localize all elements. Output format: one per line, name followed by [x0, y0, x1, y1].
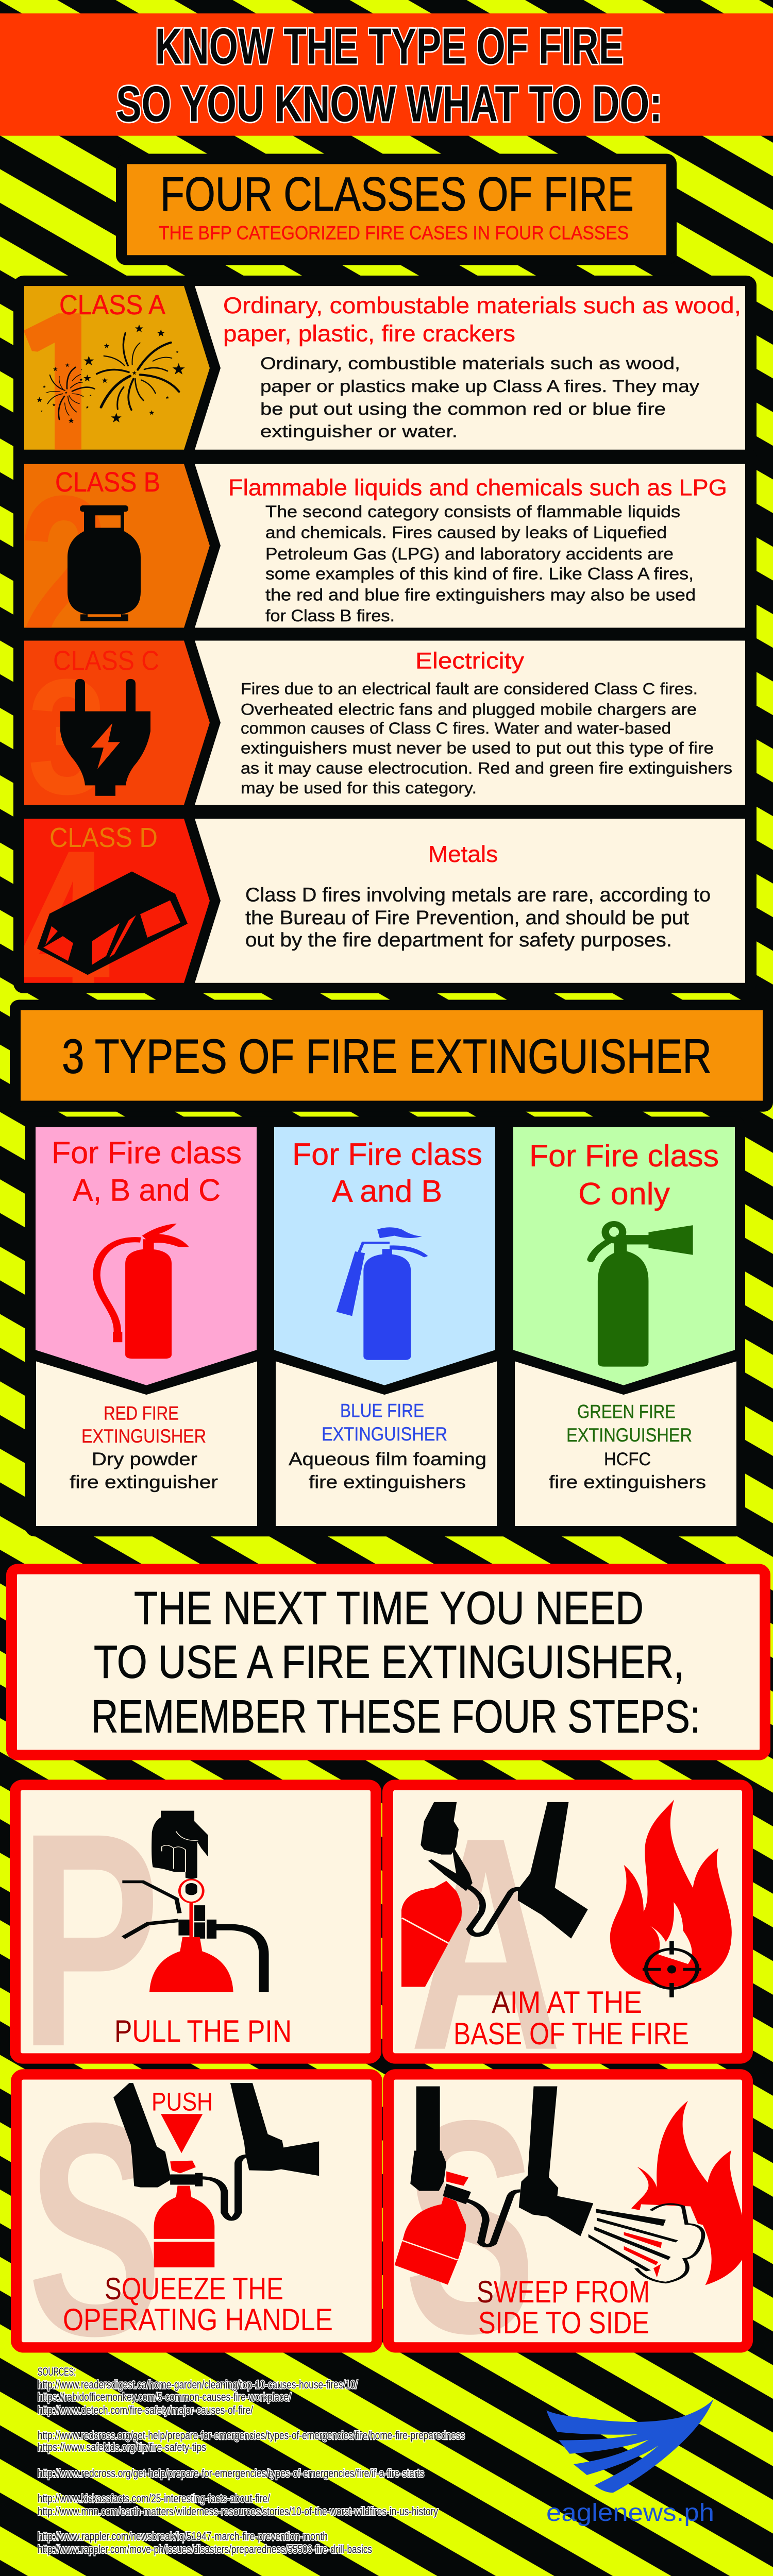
- step caption: [453, 1985, 689, 2051]
- sources list: SOURCES:: [38, 2365, 76, 2378]
- class label: CLASS D: [49, 822, 158, 853]
- heading panel: four classes of fire: [116, 154, 677, 265]
- type text: GREEN FIRE: [577, 1401, 676, 1422]
- step caption: [63, 2272, 333, 2337]
- sources list: http://www.detech.com/fire-safety/major-causes-of-fire/: [38, 2404, 254, 2416]
- class label: CLASS B: [55, 466, 160, 498]
- sources list: http://www.readersdigest.ca/home-garden/cleaning/top-10-causes-house-fires/10/: [38, 2378, 358, 2391]
- class A text: paper or plastics make up Class A fires. They may: [260, 377, 700, 396]
- class text: [529, 1139, 719, 1211]
- panel: sweep side to side: [389, 2058, 747, 2397]
- class text: A and B: [332, 1174, 442, 1208]
- class B text: The second category consists of flammable liquids: [265, 503, 680, 521]
- type text: fire extinguishers: [549, 1472, 706, 1492]
- subheading: THE BFP CATEGORIZED FIRE CASES IN FOUR CLASSES: [159, 222, 629, 243]
- class D heading: Metals: [428, 841, 498, 867]
- class C text: Fires due to an electrical fault are considered Class C fires.: [241, 680, 698, 698]
- icon: blue extinguisher: [337, 1227, 428, 1360]
- step caption: OPERATING HANDLE: [63, 2302, 333, 2337]
- class A text: [260, 354, 700, 441]
- heading panel: 3 types of fire extinguisher: [10, 1000, 773, 1112]
- step caption: AIM AT THE: [492, 1985, 642, 2020]
- icon: fireworks: [37, 325, 185, 423]
- ghost letter A: A: [409, 1774, 562, 2113]
- step caption: SQUEEZE THE: [105, 2272, 283, 2306]
- class text: [52, 1136, 242, 1207]
- class A text: Ordinary, combustible materials such as wood,: [260, 354, 680, 373]
- sources list: http://www.rappler.com/newsbreak/iq/51947-march-fire-prevention-month: [38, 2530, 328, 2543]
- row: class C: [24, 641, 745, 805]
- row: class B: [24, 464, 745, 628]
- sources list: https://www.safekids.org/tip/fire-safety-tips: [38, 2441, 206, 2454]
- class A heading: Ordinary, combustable materials such as wood,: [223, 293, 741, 318]
- class C text: extinguishers must never be used to put out this type of fire: [241, 739, 714, 757]
- icon: aim extinguisher at flame: [401, 1800, 732, 1997]
- type text: EXTINGUISHER: [81, 1425, 206, 1447]
- class text: [292, 1137, 482, 1208]
- card: red extinguisher: [36, 1127, 257, 1526]
- logo: eaglenews.ph: [546, 2399, 714, 2527]
- class B text: and chemicals. Fires caused by leaks of Liquefied: [265, 523, 667, 542]
- type text: HCFC: [604, 1450, 651, 1469]
- class A text: extinguisher or water.: [260, 422, 458, 441]
- ghost letter S: S: [404, 2058, 536, 2397]
- class C text: [241, 680, 732, 797]
- type text: RED FIRE: [104, 1402, 179, 1423]
- type text: BLUE FIRE: [340, 1400, 424, 1421]
- class A heading: [223, 293, 741, 346]
- icon: eagle wing: [546, 2399, 714, 2493]
- class B text: the red and blue fire extinguishers may also be used: [265, 586, 696, 604]
- step caption: [477, 2275, 650, 2340]
- sources list: http://www.mnn.com/earth-matters/wilderness-resources/stories/10-of-the-worst-wildfires-in-us-history: [38, 2505, 439, 2518]
- card: blue extinguisher: [274, 1127, 497, 1526]
- type text: EXTINGUISHER: [322, 1423, 447, 1445]
- type text: fire extinguishers: [309, 1472, 466, 1492]
- step caption: SIDE TO SIDE: [478, 2306, 649, 2340]
- ghost letter S: S: [27, 2060, 162, 2399]
- class label: CLASS C: [53, 645, 159, 676]
- icon: sweep extinguisher: [395, 2087, 743, 2285]
- card: green extinguisher: [513, 1127, 736, 1526]
- class C text: as it may cause electrocution. Red and green fire extinguishers: [241, 759, 732, 777]
- sources list: http://www.rappler.com/move-ph/issues/disasters/preparedness/55503-fire-drill-basics: [38, 2543, 372, 2556]
- type text: fire extinguisher: [70, 1472, 218, 1492]
- sources list: http://www.redcross.org/get-help/prepare-for-emergencies/types-of-emergencies/fire/home-fire-preparedness: [38, 2429, 465, 2442]
- class D text: the Bureau of Fire Prevention, and should be put: [245, 907, 689, 929]
- sources list: [38, 2365, 465, 2556]
- type text: Aqueous film foaming: [289, 1450, 486, 1469]
- panel: classes of fire: [13, 276, 757, 1058]
- class B text: some examples of this kind of fire. Like Class A fires,: [265, 565, 694, 584]
- class D text: [245, 884, 711, 951]
- class label: CLASS A: [59, 289, 165, 320]
- sources list: http://www.redcross.org/get-help/prepare-for-emergencies/types-of-emergencies/fire/if-a-fire-starts: [38, 2467, 424, 2480]
- numeral 1: [24, 313, 81, 450]
- type text: [289, 1400, 486, 1492]
- class C text: may be used for this category.: [241, 778, 477, 797]
- panel: squeeze the handle: [16, 2060, 377, 2399]
- sources list: http://www.kickassfacts.com/25-interesting-facts-about-fire/: [38, 2492, 271, 2505]
- sources list: https://rabidofficemonkey.com/5-common-causes-fire-workplace/: [38, 2391, 292, 2403]
- icon: pull pin: [122, 1811, 264, 1992]
- type text: [549, 1401, 706, 1492]
- class C text: common causes of Class C fires. Water and water-based: [241, 719, 671, 737]
- icon: red extinguisher: [97, 1224, 189, 1359]
- title banner: [0, 13, 773, 136]
- step caption: BASE OF THE FIRE: [453, 2016, 689, 2051]
- type text: [70, 1402, 218, 1492]
- class text: For Fire class: [529, 1139, 719, 1173]
- class C heading: Electricity: [415, 648, 524, 673]
- class B text: [265, 503, 696, 625]
- panel: pull the pin: [10, 1780, 381, 2064]
- icon: LPG tank: [68, 505, 141, 621]
- panel: extinguisher types: [25, 1116, 745, 1536]
- panel: next time heading: [11, 1569, 765, 1755]
- ghost letter P: P: [19, 1770, 160, 2110]
- class C text: Overheated electric fans and plugged mobile chargers are: [241, 700, 697, 718]
- step caption: SWEEP FROM: [477, 2275, 650, 2309]
- class D text: Class D fires involving metals are rare, according to: [245, 884, 711, 906]
- icon: green extinguisher: [591, 1221, 693, 1367]
- class D text: out by the fire department for safety purposes.: [245, 929, 672, 951]
- class text: C only: [578, 1176, 670, 1211]
- type text: Dry powder: [92, 1450, 197, 1469]
- type text: EXTINGUISHER: [566, 1424, 692, 1446]
- panel: aim at the base: [382, 1780, 753, 2064]
- logo wordmark: eaglenews.ph: [546, 2499, 714, 2527]
- heading: FOUR CLASSES OF FIRE: [160, 167, 634, 221]
- icon: squeeze handle: [113, 2083, 319, 2267]
- class A heading: paper, plastic, fire crackers: [223, 320, 515, 346]
- numeral 3: 3: [27, 645, 108, 828]
- numeral 2: 2: [18, 448, 110, 704]
- class B text: for Class B fires.: [265, 606, 395, 625]
- class text: A, B and C: [73, 1173, 221, 1207]
- step caption: PULL THE PIN: [114, 2014, 292, 2048]
- class text: For Fire class: [52, 1136, 242, 1170]
- icon: metal ingot: [37, 871, 188, 975]
- push label: PUSH: [152, 2087, 213, 2116]
- row: class D: [24, 819, 745, 983]
- row: class A: [24, 286, 745, 450]
- panel: next time heading: THE NEXT TIME YOU NEED: [134, 1583, 644, 1634]
- numeral 4: 4: [18, 802, 111, 1058]
- class B text: Petroleum Gas (LPG) and laboratory accidents are: [265, 545, 674, 564]
- icon: electric plug: [60, 679, 150, 796]
- class A text: be put out using the common red or blue fire: [260, 400, 666, 419]
- class B heading: Flammable liquids and chemicals such as LPG: [228, 474, 727, 500]
- class text: For Fire class: [292, 1137, 482, 1172]
